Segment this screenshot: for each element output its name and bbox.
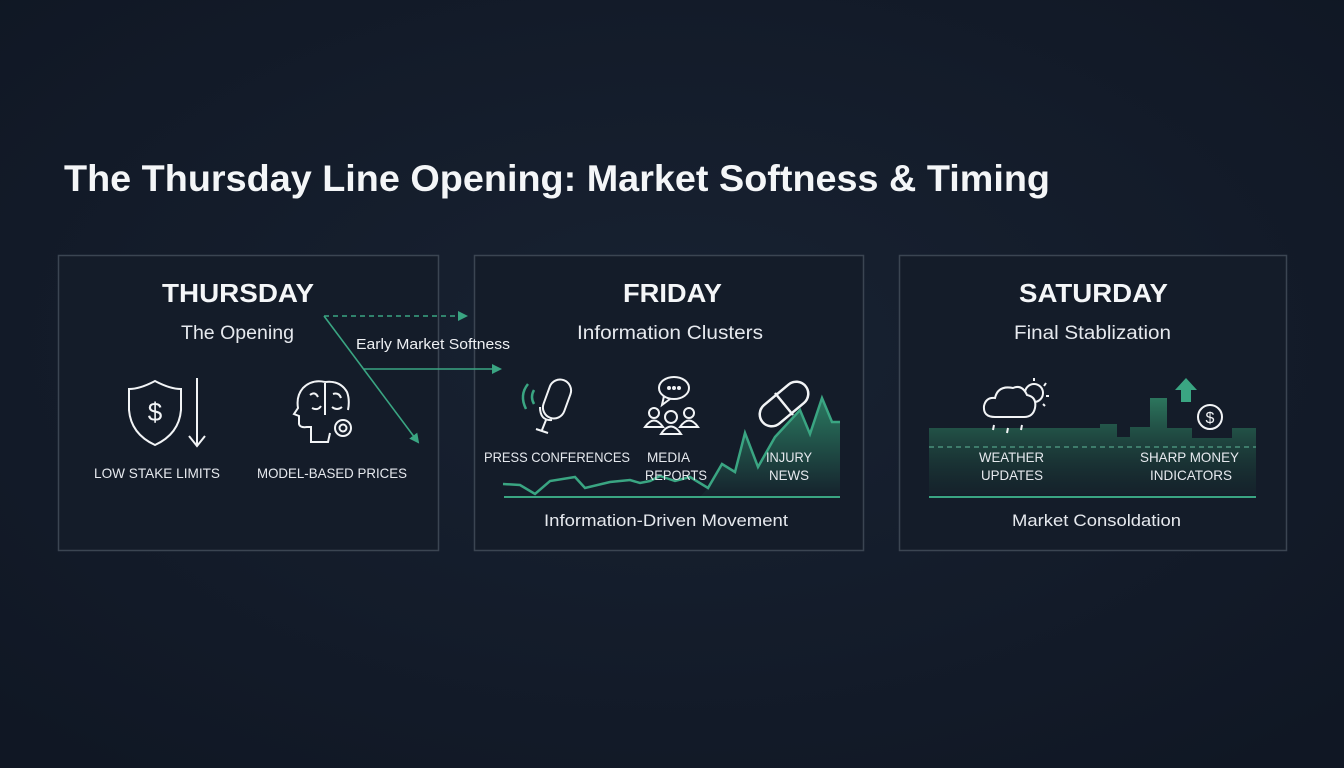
subheading: information clusters: Information Clusters bbox=[577, 323, 763, 344]
icon: dollar circle: $ bbox=[1206, 410, 1215, 427]
panel: saturday: INDICATORS bbox=[1150, 467, 1232, 483]
chart: information-driven line bbox=[503, 398, 840, 497]
caption: information-driven movement: Information-Driven Movement bbox=[544, 511, 788, 530]
icon: pill bbox=[755, 377, 813, 431]
heading: saturday: SATURDAY bbox=[1019, 278, 1168, 308]
title: The Thursday Line Opening: Market Softness & Timing bbox=[64, 158, 1050, 199]
icon: microphone bbox=[523, 376, 574, 433]
arrows: early market softness bbox=[324, 316, 500, 442]
panel: saturday: UPDATES bbox=[981, 467, 1043, 483]
caption: market consolidation: Market Consoldation bbox=[1012, 511, 1181, 530]
icon: shield dollar with down arrow bbox=[129, 378, 205, 446]
labels: PRESS CONFERENCES bbox=[484, 449, 630, 465]
labels: WEATHER bbox=[979, 449, 1044, 465]
panel: friday: INJURY bbox=[766, 449, 813, 465]
icon: media group bbox=[645, 377, 698, 434]
panel: thursday bbox=[58, 256, 438, 550]
panel: saturday: SHARP MONEY bbox=[1140, 449, 1240, 465]
label: early market softness: Early Market Softness bbox=[356, 336, 510, 353]
icon: dollar circle bbox=[1198, 405, 1222, 429]
label: model-based prices: MODEL-BASED PRICES bbox=[257, 465, 407, 481]
icon: weather cloud sun bbox=[984, 378, 1049, 433]
panel: friday: NEWS bbox=[769, 467, 809, 483]
label: low stake limits: LOW STAKE LIMITS bbox=[94, 465, 220, 481]
icon: shield dollar with down arrow: $ bbox=[148, 397, 163, 427]
heading: thursday: THURSDAY bbox=[162, 278, 314, 308]
panel: friday: REPORTS bbox=[645, 467, 707, 483]
chart: consolidation bars bbox=[929, 378, 1256, 497]
heading: friday: FRIDAY bbox=[623, 278, 722, 308]
subheading: the opening: The Opening bbox=[181, 323, 294, 344]
panel: friday bbox=[474, 256, 864, 550]
icon: brain with gear bbox=[294, 381, 351, 442]
subheading: final stabilization: Final Stablization bbox=[1014, 323, 1171, 344]
panel: saturday bbox=[900, 256, 1286, 550]
panel: friday: MEDIA bbox=[647, 449, 691, 465]
